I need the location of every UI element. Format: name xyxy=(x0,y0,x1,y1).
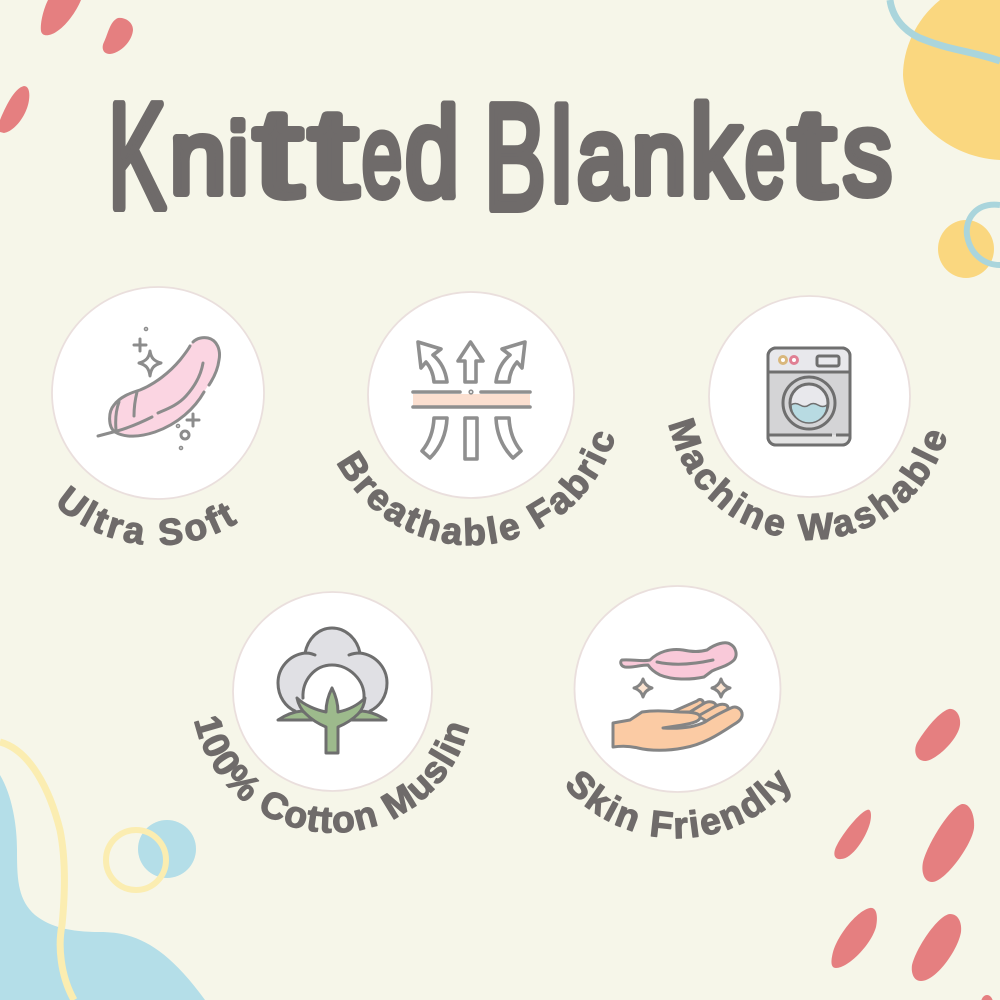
decoration: bottom-right red blobs xyxy=(831,709,993,1000)
title: t xyxy=(254,84,302,223)
title: s xyxy=(843,88,892,220)
title: t xyxy=(309,84,357,223)
icon: feather over open hand xyxy=(613,643,742,750)
feature: Ultra Soft xyxy=(51,286,265,546)
title: l xyxy=(551,82,572,229)
title: a xyxy=(577,94,627,222)
circle: Machine Washable xyxy=(709,296,910,497)
circle: Skin Friendly xyxy=(574,586,780,792)
decoration: top-left red blobs xyxy=(0,0,133,133)
icon: feather with sparkles xyxy=(98,328,220,449)
title: K xyxy=(108,71,166,240)
circle: Ultra Soft xyxy=(52,287,264,499)
decoration: top-right yellow shapes and blue lines xyxy=(890,0,1000,278)
title: e xyxy=(362,91,402,221)
circle: 100% Cotton Muslin xyxy=(233,592,432,791)
title: k xyxy=(690,80,742,224)
title xyxy=(108,71,892,241)
label: Skin Friendly: Skin Friendly xyxy=(566,770,791,839)
circle: Breathable Fabric xyxy=(368,292,574,498)
title: B xyxy=(484,72,546,241)
feature: Machine Washable xyxy=(668,295,946,541)
title: i xyxy=(228,103,248,214)
title: t xyxy=(789,84,835,223)
feature: Breathable Fabric xyxy=(336,291,614,546)
title: n xyxy=(632,100,686,216)
feature: Skin Friendly xyxy=(566,585,791,839)
label: Ultra Soft: Ultra Soft xyxy=(58,485,238,546)
feature: 100% Cotton Muslin xyxy=(194,591,470,834)
icon: washing machine xyxy=(768,348,850,445)
title: e xyxy=(745,91,785,221)
icon: breathable fabric arrows xyxy=(413,342,530,459)
title: n xyxy=(170,100,226,216)
label: Machine Washable: Machine Washable xyxy=(668,418,946,541)
label: 100% Cotton Muslin: 100% Cotton Muslin xyxy=(194,716,470,834)
decoration: bottom-left blue blob and yellow lines xyxy=(0,742,205,1000)
title: d xyxy=(405,82,459,223)
icon: cotton plant xyxy=(278,628,387,753)
label: Breathable Fabric: Breathable Fabric xyxy=(336,432,614,546)
